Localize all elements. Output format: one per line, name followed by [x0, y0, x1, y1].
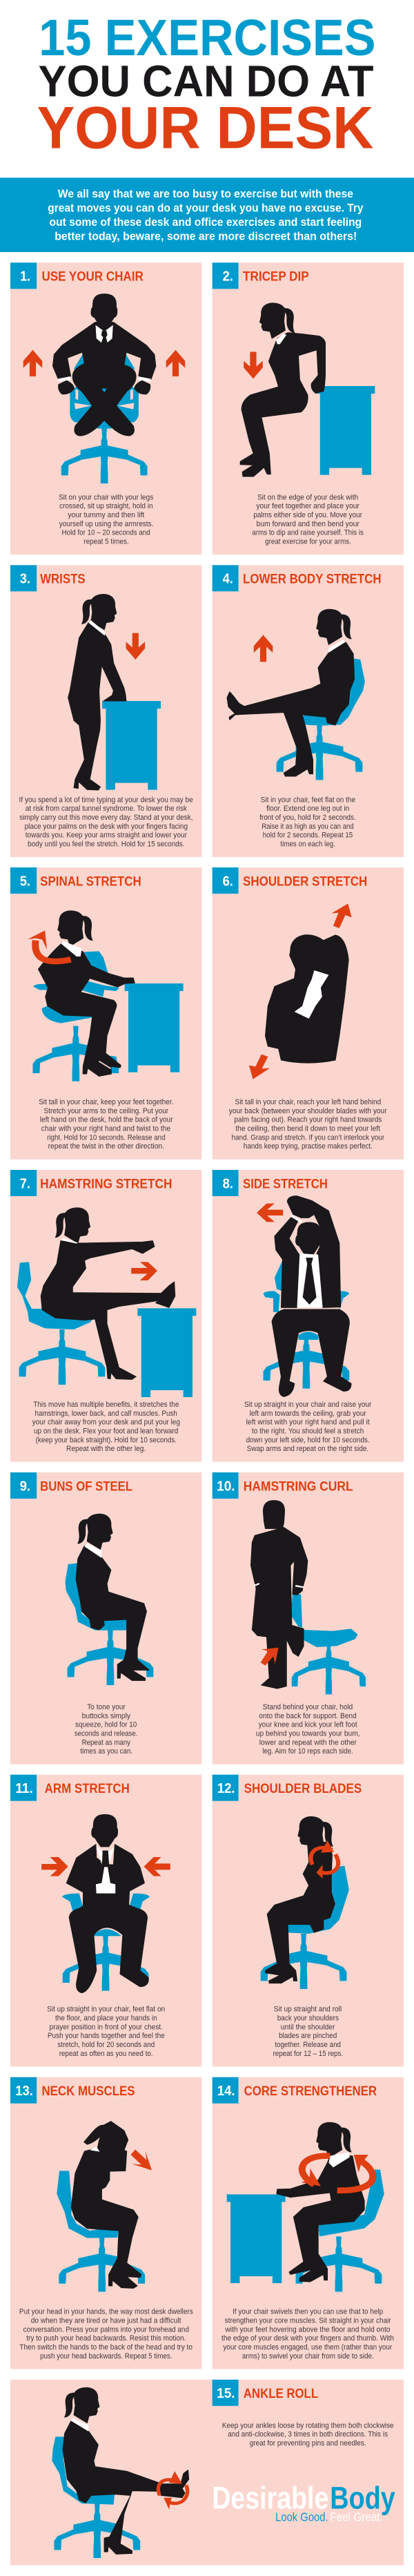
panel: 5 spinal stretch: 5. — [20, 874, 30, 889]
panel: 3 wrists: towards you. Keep your arms straight and lower your — [26, 830, 187, 839]
panel: 7 hamstring stretch: your chair away from your desk and put your leg — [32, 1417, 180, 1426]
panel: 4 lower body stretch: front of you, hold for 2 seconds. — [259, 813, 356, 822]
panel: 6 shoulder stretch: hands keep trying, practise makes perfect. — [244, 1142, 373, 1151]
logo: Desirable Body: Look Good. — [275, 2510, 328, 2524]
panel: 11 arm stretch: repeat as often as you need to. — [59, 2049, 153, 2058]
panel: 4 lower body stretch: Sit in your chair, feet flat on the — [261, 795, 355, 804]
panel: 4 lower body stretch — [213, 565, 404, 857]
panel: 7 hamstring stretch: HAMSTRING STRETCH — [40, 1177, 172, 1191]
panel: 15 ankle roll: great for preventing pins and needles. — [250, 2439, 366, 2448]
logo: Desirable Body: Desirable — [212, 2481, 328, 2516]
panel: 12 shoulder blades: SHOULDER BLADES — [244, 1781, 362, 1796]
panel: 4 lower body stretch: hold for 2 seconds. Repeat 15 — [263, 830, 353, 839]
panel: 13 neck muscles: 13. — [15, 2083, 33, 2099]
panel: 15 ankle roll: 15. — [217, 2385, 235, 2401]
panel: 3 wrists: WRISTS — [40, 572, 86, 586]
panel: 10 hamstring curl: 10. — [217, 1479, 235, 1494]
panel: 4 lower body stretch: 4. — [223, 571, 233, 586]
figure: woman seated upright — [66, 1514, 153, 1685]
panel: 1 use your chair — [10, 262, 201, 555]
panel: 1 use your chair: Sit on your chair with your legs — [59, 492, 153, 501]
panel: 3 wrists: body until you feel the stretch. Hold for 15 seconds. — [28, 839, 184, 848]
panel: 5 spinal stretch: Stretch your arms to the ceiling. Put your — [44, 1106, 168, 1115]
panel: 2 tricep dip: arms to dip and raise yourself. This is — [252, 528, 364, 537]
panel: 9 buns of steel: BUNS OF STEEL — [40, 1479, 132, 1494]
panel: 13 neck muscles: Then switch the hands to the back of the head and try to — [19, 2343, 193, 2352]
panel: 11 arm stretch: 11. — [15, 1780, 33, 1796]
panel: 14 core strengthener: CORE STRENGTHENER — [244, 2084, 377, 2099]
figure: woman rolling shoulders — [261, 1817, 349, 1989]
figure: woman extending leg on chair — [227, 609, 365, 780]
panel: 4 lower body stretch: Raise it as high as you can and — [262, 822, 354, 831]
figure: woman with head in hands — [57, 2122, 152, 2291]
panel: 13 neck muscles: try to push your head backwards. Resist this motion. — [26, 2334, 186, 2343]
panel: 4 lower body stretch: floor. Extend one leg out in — [266, 804, 349, 813]
panel: 5 spinal stretch: right. Hold for 10 seconds. Release and — [47, 1133, 166, 1142]
panel: 10 hamstring curl: HAMSTRING CURL — [244, 1479, 353, 1494]
panel: 1 use your chair: 1. — [20, 269, 30, 284]
panel: 3 wrists: place your palms on the desk with your fingers facing — [25, 822, 188, 831]
panel: 12 shoulder blades — [213, 1775, 404, 2066]
panel: 9 buns of steel: seconds and release. — [75, 1729, 137, 1738]
panel: 9 buns of steel: 9. — [20, 1479, 30, 1494]
panel: 6 shoulder stretch: the ceiling, then bend it down to meet your left — [235, 1124, 381, 1133]
figure: woman swivelling chair at desk — [227, 2122, 384, 2291]
panel: 11 arm stretch: ARM STRETCH — [45, 1781, 130, 1796]
figure: person reaching behind back — [249, 903, 352, 1079]
panel: 10 hamstring curl — [213, 1472, 404, 1765]
panel: 2 tricep dip: 2. — [223, 269, 233, 284]
panel: 7 hamstring stretch: Repeat with the other leg. — [66, 1444, 146, 1453]
panel: 12 shoulder blades: 12. — [217, 1780, 235, 1796]
panel: 12 shoulder blades: together. Release and — [275, 2040, 341, 2049]
panel: 5 spinal stretch: repeat the twist in the other direction. — [48, 1142, 164, 1151]
panel: 13 neck muscles: conversation. Press your palms into your forehead and — [23, 2325, 189, 2334]
panel: 5 spinal stretch — [10, 867, 201, 1160]
panel: 8 side stretch: Sit up straight in your chair and raise your — [244, 1400, 371, 1409]
panel: 13 neck muscles: Put your head in your hands, the way most desk dwellers — [19, 2307, 193, 2316]
panel: 6 shoulder stretch — [213, 867, 404, 1160]
panel: 3 wrists: simply carry out this move every day. Stand at your desk, — [19, 813, 193, 822]
intro banner — [0, 177, 414, 252]
panel: 6 shoulder stretch: palm facing out). Reach your right hand towards — [234, 1115, 382, 1124]
panel: 12 shoulder blades: until the shoulder — [281, 2022, 335, 2031]
logo: Desirable Body: Feel Great. — [330, 2510, 383, 2524]
panel: 15 ankle roll: ANKLE ROLL — [244, 2386, 318, 2401]
panel: 14 core strengthener: 14. — [217, 2083, 235, 2099]
figure: woman dipping from desk — [240, 303, 375, 477]
figure: man standing behind chair — [251, 1501, 366, 1694]
panel: 13 neck muscles: push your head backwards. Repeat 5 times. — [40, 2352, 172, 2361]
panel: 4 lower body stretch: times on each leg. — [280, 839, 335, 848]
panel: 3 wrists: If you spend a lot of time typing at your desk you may be — [19, 795, 193, 804]
panel: 8 side stretch: 8. — [223, 1176, 233, 1191]
panel: 7 hamstring stretch — [10, 1170, 201, 1462]
panel: 11 arm stretch: prayer position in front of your chest. — [50, 2022, 163, 2031]
figure: man lifting himself on chair — [23, 294, 185, 483]
figure: man stretching arms overhead — [257, 1196, 351, 1396]
panel: 6 shoulder stretch: SHOULDER STRETCH — [243, 874, 367, 889]
panel: 5 spinal stretch: SPINAL STRETCH — [40, 874, 141, 889]
panel: 2 tricep dip: Sit on the edge of your desk with — [257, 492, 358, 501]
panel: 3 wrists: 3. — [20, 571, 30, 586]
intro banner: We all say that we are too busy to exercise but with these — [58, 187, 353, 200]
panel: 9 buns of steel: squeeze, hold for 10 — [75, 1720, 137, 1729]
panel: 8 side stretch — [213, 1170, 404, 1462]
panel: 12 shoulder blades: Sit up straight and roll — [274, 2004, 342, 2013]
panel: 10 hamstring curl: onto the back for support. Bend — [259, 1711, 357, 1720]
panel: 5 spinal stretch: left hand on the desk, hold the back of your — [40, 1115, 173, 1124]
panel: 14 core strengthener — [213, 2077, 404, 2369]
panel: 8 side stretch: SIDE STRETCH — [243, 1177, 328, 1191]
panel: 11 arm stretch: stretch, hold for 20 seconds and — [57, 2040, 155, 2049]
panel: 7 hamstring stretch: up on the desk. Flex your foot and lean forward — [34, 1426, 178, 1435]
panel: 9 buns of steel: buttocks simply — [82, 1711, 130, 1720]
panel: 9 buns of steel: times as you can. — [80, 1747, 132, 1756]
panel: 14 core strengthener: arms) to swivel your chair from side to side. — [242, 2352, 374, 2361]
panel: 7 hamstring stretch: (keep your back straight). Hold for 10 seconds. — [36, 1435, 177, 1444]
panel: 10 hamstring curl: leg. Aim for 10 reps each side. — [262, 1747, 353, 1756]
panel: 10 hamstring curl: up behind you towards your bum, — [256, 1729, 360, 1738]
figure: woman leaning on desk — [68, 595, 161, 790]
panel: 8 side stretch: Swap arms and repeat on the right side. — [247, 1444, 368, 1453]
panel: 7 hamstring stretch: hamstrings, lower back, and calf muscles. Push — [35, 1409, 177, 1418]
panel: 7 hamstring stretch: 7. — [20, 1176, 30, 1191]
panel: 11 arm stretch — [10, 1775, 201, 2066]
panel: 7 hamstring stretch: This move has multiple benefits, it stretches the — [33, 1400, 179, 1409]
panel: 8 side stretch: down your left side, hold for 10 seconds. — [246, 1435, 370, 1444]
panel: 9 buns of steel: Repeat as many — [82, 1738, 130, 1747]
panel: 9 buns of steel: To tone your — [87, 1702, 126, 1711]
panel: 10 hamstring curl: Stand behind your chair, hold — [263, 1702, 353, 1711]
figure: woman twisting on chair at desk — [28, 911, 184, 1082]
panel: 1 use your chair: yourself up using the armrests. — [59, 519, 153, 528]
panel: 10 hamstring curl: lower and repeat with the other — [259, 1738, 357, 1747]
panel: 8 side stretch: to the right. You should feel a stretch — [252, 1426, 364, 1435]
panel: 2 tricep dip: TRICEP DIP — [243, 269, 309, 284]
panel: 2 tricep dip: your feet together and place your — [257, 501, 359, 510]
figure: man pressing hands in prayer position — [41, 1814, 170, 1993]
panel: 13 neck muscles: do when they are tired or have just had a difficult — [31, 2316, 181, 2325]
panel: 12 shoulder blades: back your shoulders — [277, 2013, 339, 2022]
panel: 6 shoulder stretch: 6. — [223, 874, 233, 889]
panel: 12 shoulder blades: blades are pinched — [279, 2031, 337, 2040]
panel: 1 use your chair: Hold for 10 – 20 seconds and — [62, 528, 150, 537]
figure: woman rolling ankle — [52, 2387, 189, 2558]
panel: 3 wrists — [10, 565, 201, 857]
panel: 1 use your chair: repeat 5 times. — [83, 537, 129, 546]
title — [37, 9, 376, 161]
panel: 2 tricep dip: palms either side of you. Move your — [253, 510, 362, 519]
panel: 11 arm stretch: Push your hands together and feel the — [48, 2031, 165, 2040]
panel: 5 spinal stretch: chair with your right hand and twist to the — [41, 1124, 171, 1133]
panel: 2 tricep dip: great exercise for your arms. — [265, 537, 351, 546]
panel: 12 shoulder blades: repeat for 12 – 15 reps. — [273, 2049, 343, 2058]
panel: 6 shoulder stretch: Sit tall in your chair, reach your left hand behind — [235, 1097, 381, 1106]
panel: 15 ankle roll — [10, 2380, 404, 2565]
panel: 13 neck muscles — [10, 2077, 201, 2369]
panel: 1 use your chair: your tummy and then lift — [68, 510, 145, 519]
panel: 2 tricep dip — [213, 262, 404, 555]
panel: 5 spinal stretch: Sit tall in your chair, keep your feet together. — [39, 1097, 173, 1106]
panel: 3 wrists: at risk from carpal tunnel syndrome. To lower the risk — [26, 804, 187, 813]
panel: 1 use your chair: crossed, sit up straight, hold in — [59, 501, 153, 510]
panel: 2 tricep dip: bum forward and then bend your — [257, 519, 359, 528]
panel: 13 neck muscles: NECK MUSCLES — [41, 2084, 135, 2099]
panel: 11 arm stretch: Sit up straight in your chair, feet flat on — [47, 2004, 165, 2013]
intro banner: better today, beware, some are more discreet than others! — [55, 229, 357, 242]
panel: 8 side stretch: left wrist with your right hand and pull it — [246, 1417, 370, 1426]
panel: 1 use your chair: USE YOUR CHAIR — [41, 269, 144, 284]
panel: 9 buns of steel — [10, 1472, 201, 1765]
panel: 8 side stretch: left arm towards the ceiling, grab your — [250, 1409, 366, 1418]
panel: 10 hamstring curl: your knee and kick your left foot — [259, 1720, 357, 1729]
panel: 11 arm stretch: the floor, and place your hands in — [55, 2013, 157, 2022]
figure: woman with leg on desk — [17, 1208, 196, 1397]
